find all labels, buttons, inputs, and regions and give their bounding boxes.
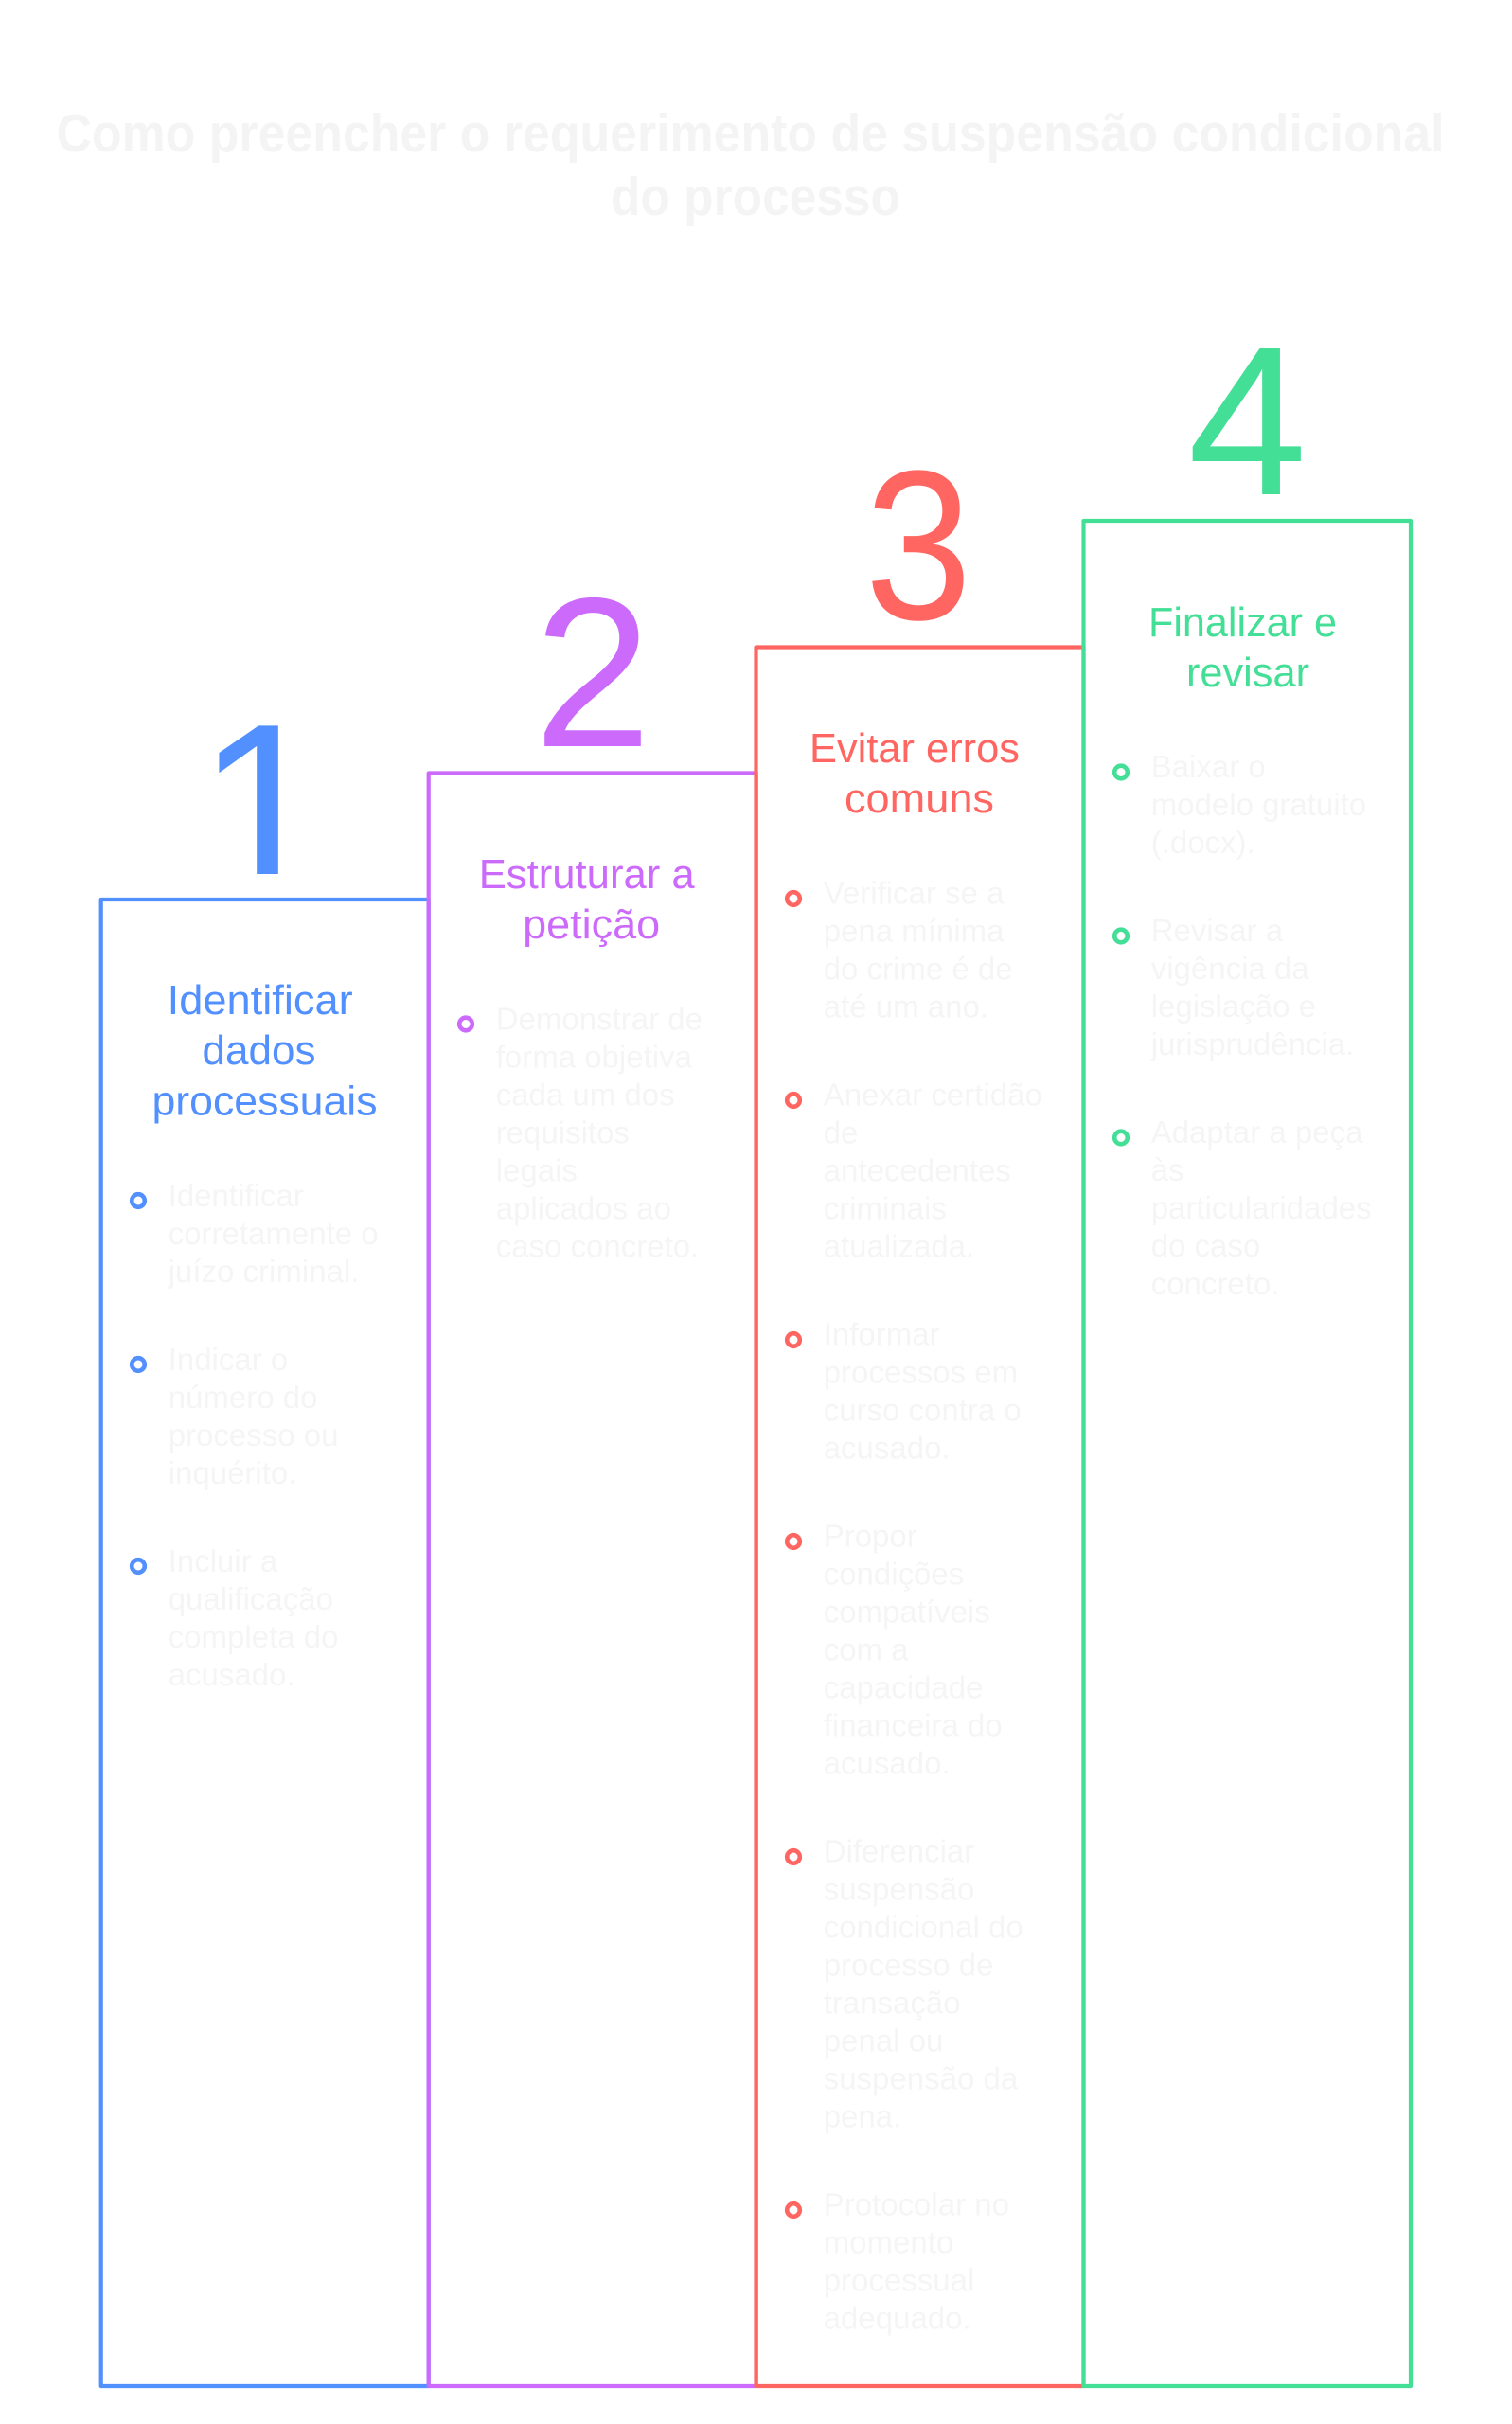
step 3 item 2: de	[824, 1115, 858, 1150]
panel: step 3	[756, 426, 1083, 2386]
step 2 heading: petição	[523, 901, 660, 948]
step 1 item 1	[132, 1178, 379, 1289]
step 3 item 5	[787, 1833, 1023, 2134]
step 1 item 2	[132, 1342, 338, 1490]
step 3 item 4: condições	[824, 1557, 964, 1591]
step 1 item 1: Identificar	[169, 1178, 304, 1213]
step 4 item 2: jurisprudência.	[1150, 1026, 1354, 1061]
step 2 heading	[479, 851, 695, 948]
step 3 item 5: suspensão da	[824, 2060, 1019, 2096]
step 3 item 1: do crime é de	[824, 951, 1013, 987]
step 3 item 6: adequado.	[824, 2301, 971, 2335]
step 1 item 3: Incluir a	[169, 1543, 278, 1578]
step 2 item 1: aplicados ao	[496, 1191, 671, 1225]
step 1 item 3: completa do	[169, 1619, 338, 1654]
step 2 heading: Estruturar a	[479, 851, 695, 898]
step 3 item 5: condicional do	[824, 1909, 1023, 1945]
step 1 heading	[151, 977, 377, 1125]
step 1 item 2: número do	[169, 1380, 317, 1415]
step 1 column outline	[101, 900, 429, 2386]
step 2 item 1: cada um dos	[496, 1078, 675, 1112]
step 4 item 2	[1114, 913, 1354, 1061]
step 3 item 3: processos em	[824, 1354, 1018, 1390]
step 2 item 1: requisitos	[496, 1115, 630, 1150]
step 1 item 2: inquérito.	[169, 1455, 296, 1490]
panel: step 4	[1083, 301, 1411, 2386]
step 2 item 1	[459, 1002, 703, 1263]
step 3 item 5: Diferenciar	[824, 1833, 974, 1869]
step 4 item 3: concreto.	[1151, 1266, 1279, 1301]
step 3 item 4: Propor	[824, 1519, 917, 1553]
step 3 item 1: pena mínima	[824, 913, 1005, 949]
step 3 item 5: transação	[824, 1985, 961, 2021]
step 3 item 1: Verificar se a	[824, 875, 1005, 911]
step 3 item 4: capacidade	[824, 1670, 984, 1704]
step 1 item 3: qualificação	[169, 1581, 333, 1616]
step 4 heading: Finalizar e	[1148, 599, 1337, 646]
step 1 item 3	[132, 1543, 338, 1692]
step 4 item 3: particularidades	[1151, 1190, 1372, 1225]
step 3 item 1	[787, 875, 1013, 1025]
step 3 item 2	[787, 1078, 1042, 1263]
step 3 item 4: com a	[824, 1632, 909, 1666]
step 2 item 1: forma objetiva	[496, 1040, 693, 1074]
step 2 item 1: Demonstrar de	[496, 1002, 703, 1036]
step 4 heading	[1148, 599, 1337, 696]
step 1 item 2: processo ou	[169, 1417, 338, 1453]
panel: step 1	[101, 674, 429, 2386]
step 3 heading: comuns	[845, 775, 994, 822]
step 3 heading: Evitar erros	[809, 725, 1020, 772]
step 3 item 2: atualizada.	[824, 1229, 974, 1263]
step 4 item 3: às	[1151, 1152, 1184, 1187]
step 3 column outline	[756, 648, 1083, 2386]
step 3 item 1: até um ano.	[824, 989, 988, 1025]
step 1 item 1: corretamente o	[169, 1216, 379, 1251]
step 4 item 1	[1114, 749, 1366, 860]
panel: step 2	[429, 553, 756, 2386]
step 3 item 4: acusado.	[824, 1746, 951, 1780]
step 4 item 1: (.docx).	[1151, 825, 1255, 860]
step 4 column outline	[1083, 521, 1411, 2386]
step 1 heading: dados	[203, 1027, 316, 1074]
step 3 item 5: suspensão	[824, 1871, 974, 1907]
step 3 item 3: curso contra o	[824, 1392, 1022, 1428]
step 1 heading: processuais	[151, 1078, 377, 1125]
step 3 item 4: financeira do	[824, 1708, 1003, 1742]
step 3 item 4: compatíveis	[824, 1595, 990, 1629]
step 3 item 5: penal ou	[824, 2023, 943, 2059]
step 3 item 6	[787, 2187, 1009, 2335]
step 3 item 5: pena.	[824, 2098, 901, 2134]
step 3 item 3	[787, 1316, 1022, 1466]
step 3 item 5: processo de	[824, 1947, 993, 1983]
step 4 item 3: Adaptar a peça	[1151, 1114, 1363, 1150]
step 3 item 6: Protocolar no	[824, 2187, 1009, 2221]
step 4 item 2: legislação e	[1151, 989, 1316, 1024]
step 3 item 6: processual	[824, 2263, 974, 2297]
step 2 item 1: caso concreto.	[496, 1229, 699, 1263]
step 4 item 1: modelo gratuito	[1151, 787, 1366, 822]
step 3 item 3: Informar	[824, 1316, 940, 1352]
step 1 item 3: acusado.	[169, 1657, 295, 1692]
step 4 number: 4	[1187, 301, 1307, 540]
step 4 item 2: vigência da	[1151, 951, 1309, 986]
step 3 item 2: antecedentes	[824, 1153, 1011, 1187]
step 4 item 3: do caso	[1151, 1228, 1260, 1263]
step 4 heading: revisar	[1186, 650, 1309, 696]
step 1 item 2: Indicar o	[169, 1342, 288, 1377]
step 4 item 3	[1114, 1114, 1372, 1301]
step 4 item 1: Baixar o	[1151, 749, 1266, 784]
step 3 number: 3	[865, 426, 971, 665]
step 1 number: 1	[196, 674, 330, 945]
step 3 item 2: Anexar certidão	[824, 1078, 1042, 1112]
step 1 heading: Identificar	[168, 977, 353, 1024]
title	[57, 103, 1445, 227]
step 3 item 3: acusado.	[824, 1430, 951, 1466]
step 1 item 1: juízo criminal.	[168, 1254, 359, 1289]
step 3 heading	[809, 725, 1020, 822]
step 4 item 2: Revisar a	[1151, 913, 1284, 948]
title: do processo	[611, 167, 900, 227]
step 3 item 4	[787, 1519, 1003, 1780]
step 3 item 2: criminais	[824, 1191, 947, 1225]
step 3 item 6: momento	[824, 2225, 953, 2259]
step 2 number: 2	[534, 553, 651, 792]
step 2 column outline	[429, 773, 756, 2386]
step 2 item 1: legais	[496, 1153, 578, 1187]
